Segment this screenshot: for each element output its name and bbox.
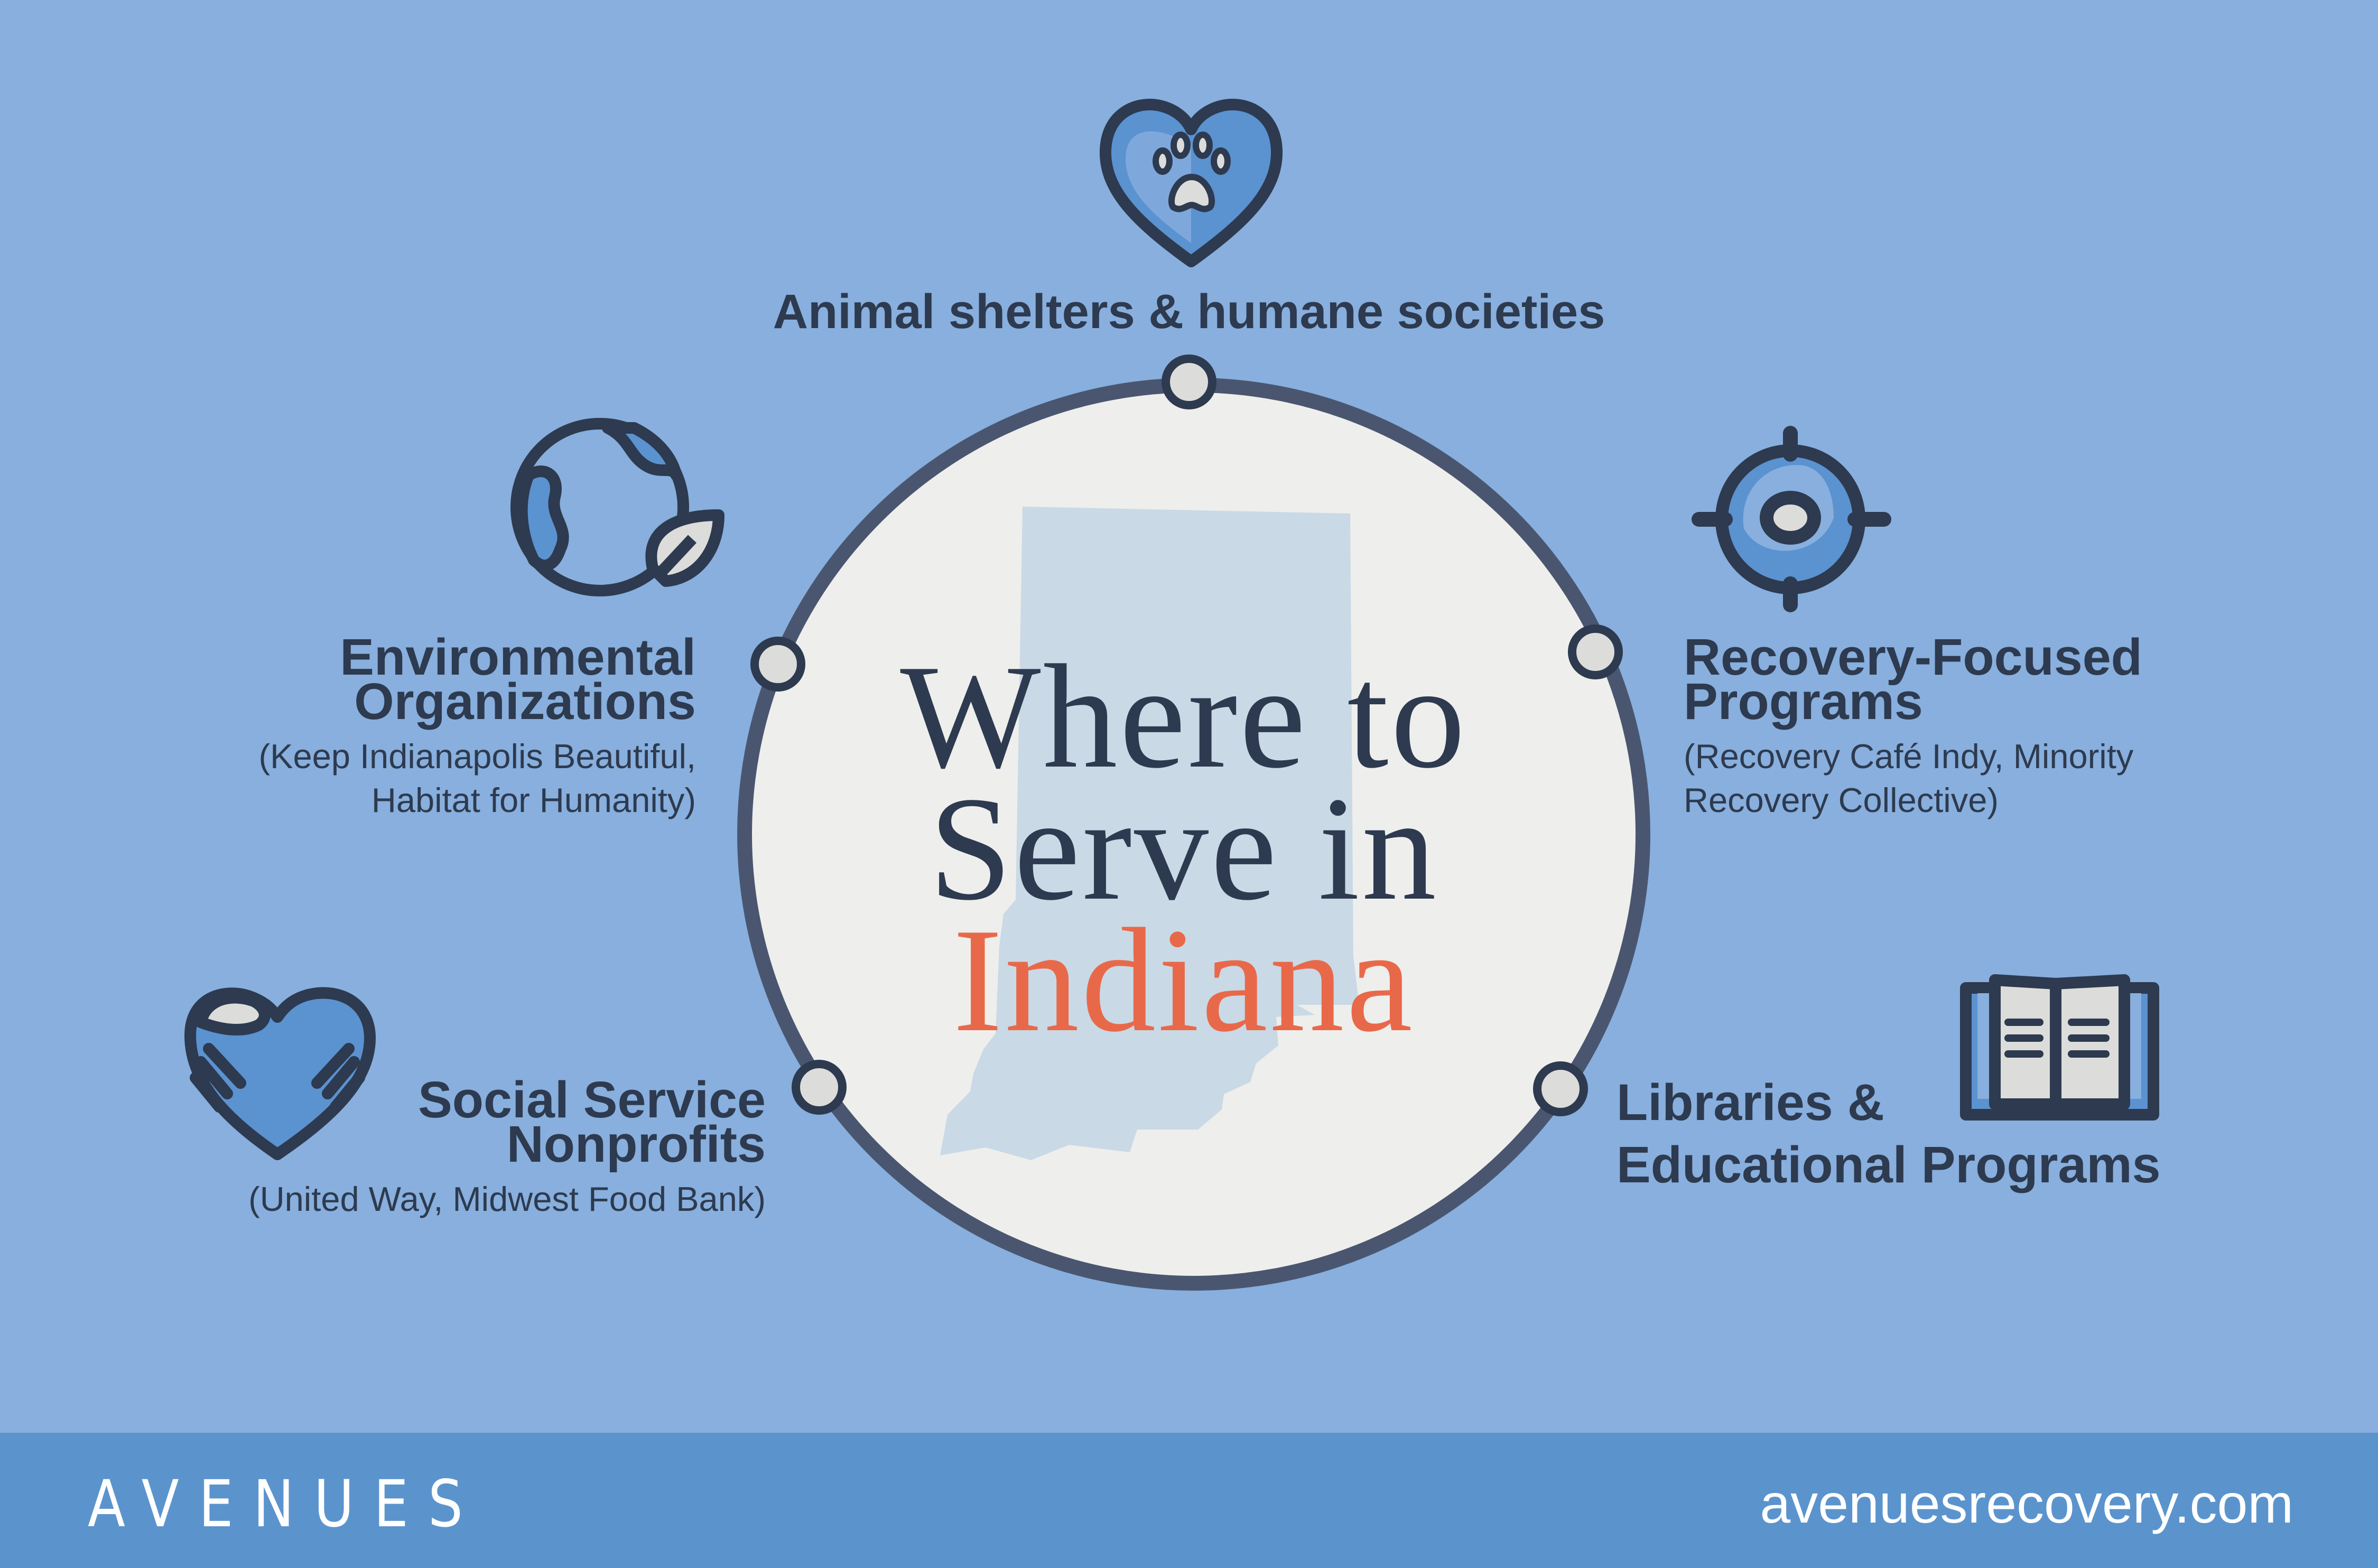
circle (745, 385, 1643, 1283)
footer url: avenuesrecovery.com (1760, 1473, 2293, 1535)
connector dot: right (1572, 629, 1619, 675)
heading: Animal shelters: Animal shelters & humane societies (773, 285, 1605, 339)
text block: Environmental Organizations: Organizations (354, 673, 696, 730)
text block: Recovery-Focused Programs: Recovery-Focused (1684, 628, 2142, 686)
text block: Social Service Nonprofits: (United Way, Midwest Food Bank) (248, 1180, 766, 1218)
connector dot: lower right (1537, 1066, 1584, 1112)
connector dot: lower left (796, 1064, 842, 1110)
text block: Environmental Organizations: Environmental (340, 628, 696, 686)
logo: AVENUES: AVENUES (88, 1467, 482, 1542)
text block: Social Service Nonprofits: Nonprofits (507, 1115, 766, 1173)
icon: heart with paw (1106, 105, 1277, 262)
text block: Recovery-Focused Programs: (Recovery Café Indy, Minority (1684, 737, 2133, 776)
title: Indiana (953, 898, 1415, 1062)
text block: Libraries: Educational Programs (1617, 1136, 2161, 1193)
connector dot: left (755, 641, 801, 687)
icon: hands holding heart (190, 993, 370, 1154)
text block: Recovery-Focused Programs: Programs (1684, 673, 1923, 730)
icon: target (1699, 433, 1884, 605)
text block: Environmental Organizations (258, 628, 696, 819)
title: Serve in (929, 766, 1438, 931)
connector dot: top (1166, 359, 1212, 405)
text block: Libraries: Libraries & (1617, 1074, 1884, 1131)
footer bar (0, 1433, 2378, 1568)
Indiana map shape (940, 507, 1359, 1160)
text block: Libraries (1617, 1074, 2161, 1193)
text block: Environmental Organizations: (Keep Indianapolis Beautiful, (258, 737, 696, 776)
title: Where to (900, 634, 1467, 799)
text block: Recovery-Focused Programs (1684, 628, 2142, 819)
text block: Recovery-Focused Programs: Recovery Collective) (1684, 781, 1999, 819)
title (900, 634, 1467, 1062)
text block: Social Service Nonprofits: Social Service (418, 1071, 766, 1128)
text block: Environmental Organizations: Habitat for Humanity) (371, 781, 696, 819)
text block: Social Service Nonprofits (248, 1071, 766, 1218)
icon: open book (1966, 980, 2153, 1115)
icon: globe with leaf (516, 424, 719, 591)
